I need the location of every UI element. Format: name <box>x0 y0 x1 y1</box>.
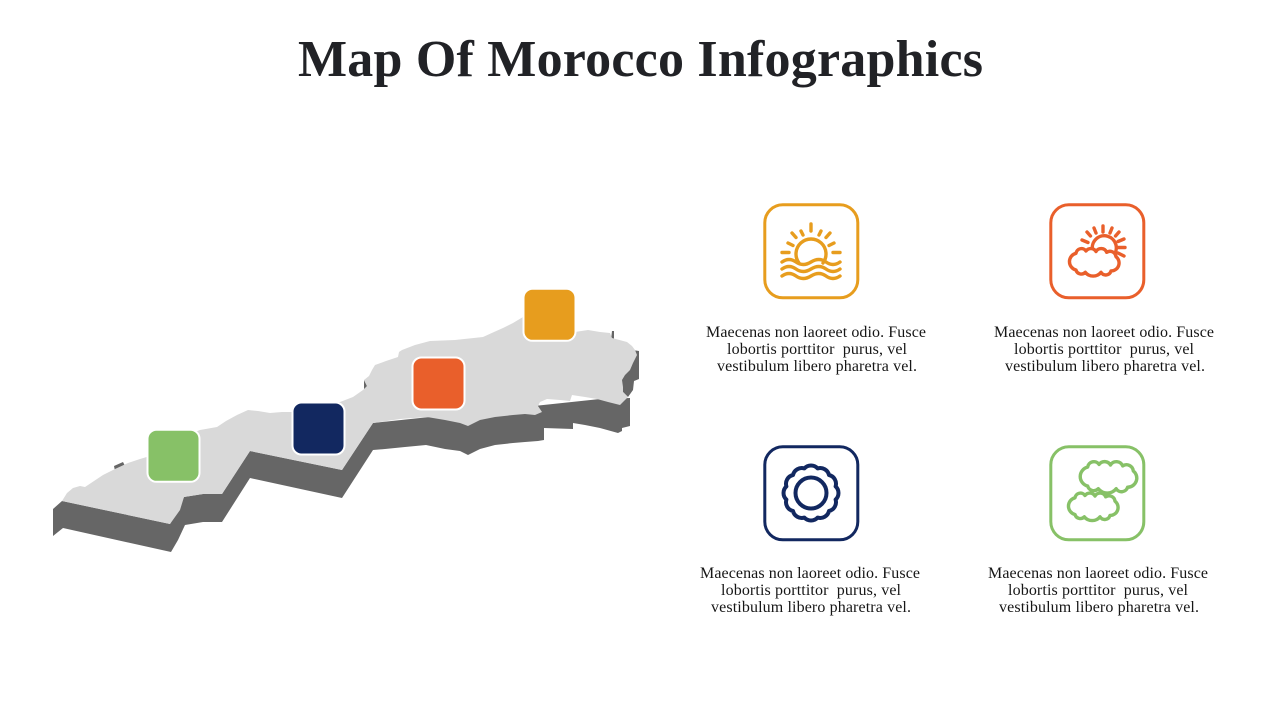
item 2: sun and cloud <box>994 205 1214 375</box>
text block: lobortis porttitor purus, vel <box>721 582 902 599</box>
text block: lobortis porttitor purus, vel <box>1008 582 1189 599</box>
item 3: badge <box>700 447 920 616</box>
text block <box>994 324 1214 375</box>
icon: sun behind cloud <box>1051 205 1144 298</box>
text block: Maecenas non laoreet odio. Fusce <box>988 565 1208 582</box>
text block: lobortis porttitor purus, vel <box>1014 341 1195 358</box>
map: extruded shadow <box>53 331 639 552</box>
text block <box>988 565 1208 616</box>
text block: Maecenas non laoreet odio. Fusce <box>994 324 1214 341</box>
marker: orange <box>412 358 464 410</box>
map: top surface <box>62 317 637 524</box>
icon: sun over water <box>765 205 858 298</box>
text block: vestibulum libero pharetra vel. <box>999 599 1199 616</box>
title: Map Of Morocco Infographics <box>298 31 983 88</box>
map of Morocco <box>53 289 639 552</box>
item 1: sun over water <box>706 205 926 375</box>
text block: Maecenas non laoreet odio. Fusce <box>706 324 926 341</box>
marker: navy <box>292 402 344 454</box>
text block: vestibulum libero pharetra vel. <box>711 599 911 616</box>
text block: vestibulum libero pharetra vel. <box>1005 358 1205 375</box>
text block <box>700 565 920 616</box>
item 4: clouds <box>988 447 1208 616</box>
icon: scalloped badge <box>765 447 858 540</box>
text block <box>706 324 926 375</box>
text block: lobortis porttitor purus, vel <box>727 341 908 358</box>
text block: vestibulum libero pharetra vel. <box>717 358 917 375</box>
icon: two clouds <box>1051 447 1144 540</box>
marker: green <box>148 430 200 482</box>
marker: amber <box>524 289 576 341</box>
text block: Maecenas non laoreet odio. Fusce <box>700 565 920 582</box>
